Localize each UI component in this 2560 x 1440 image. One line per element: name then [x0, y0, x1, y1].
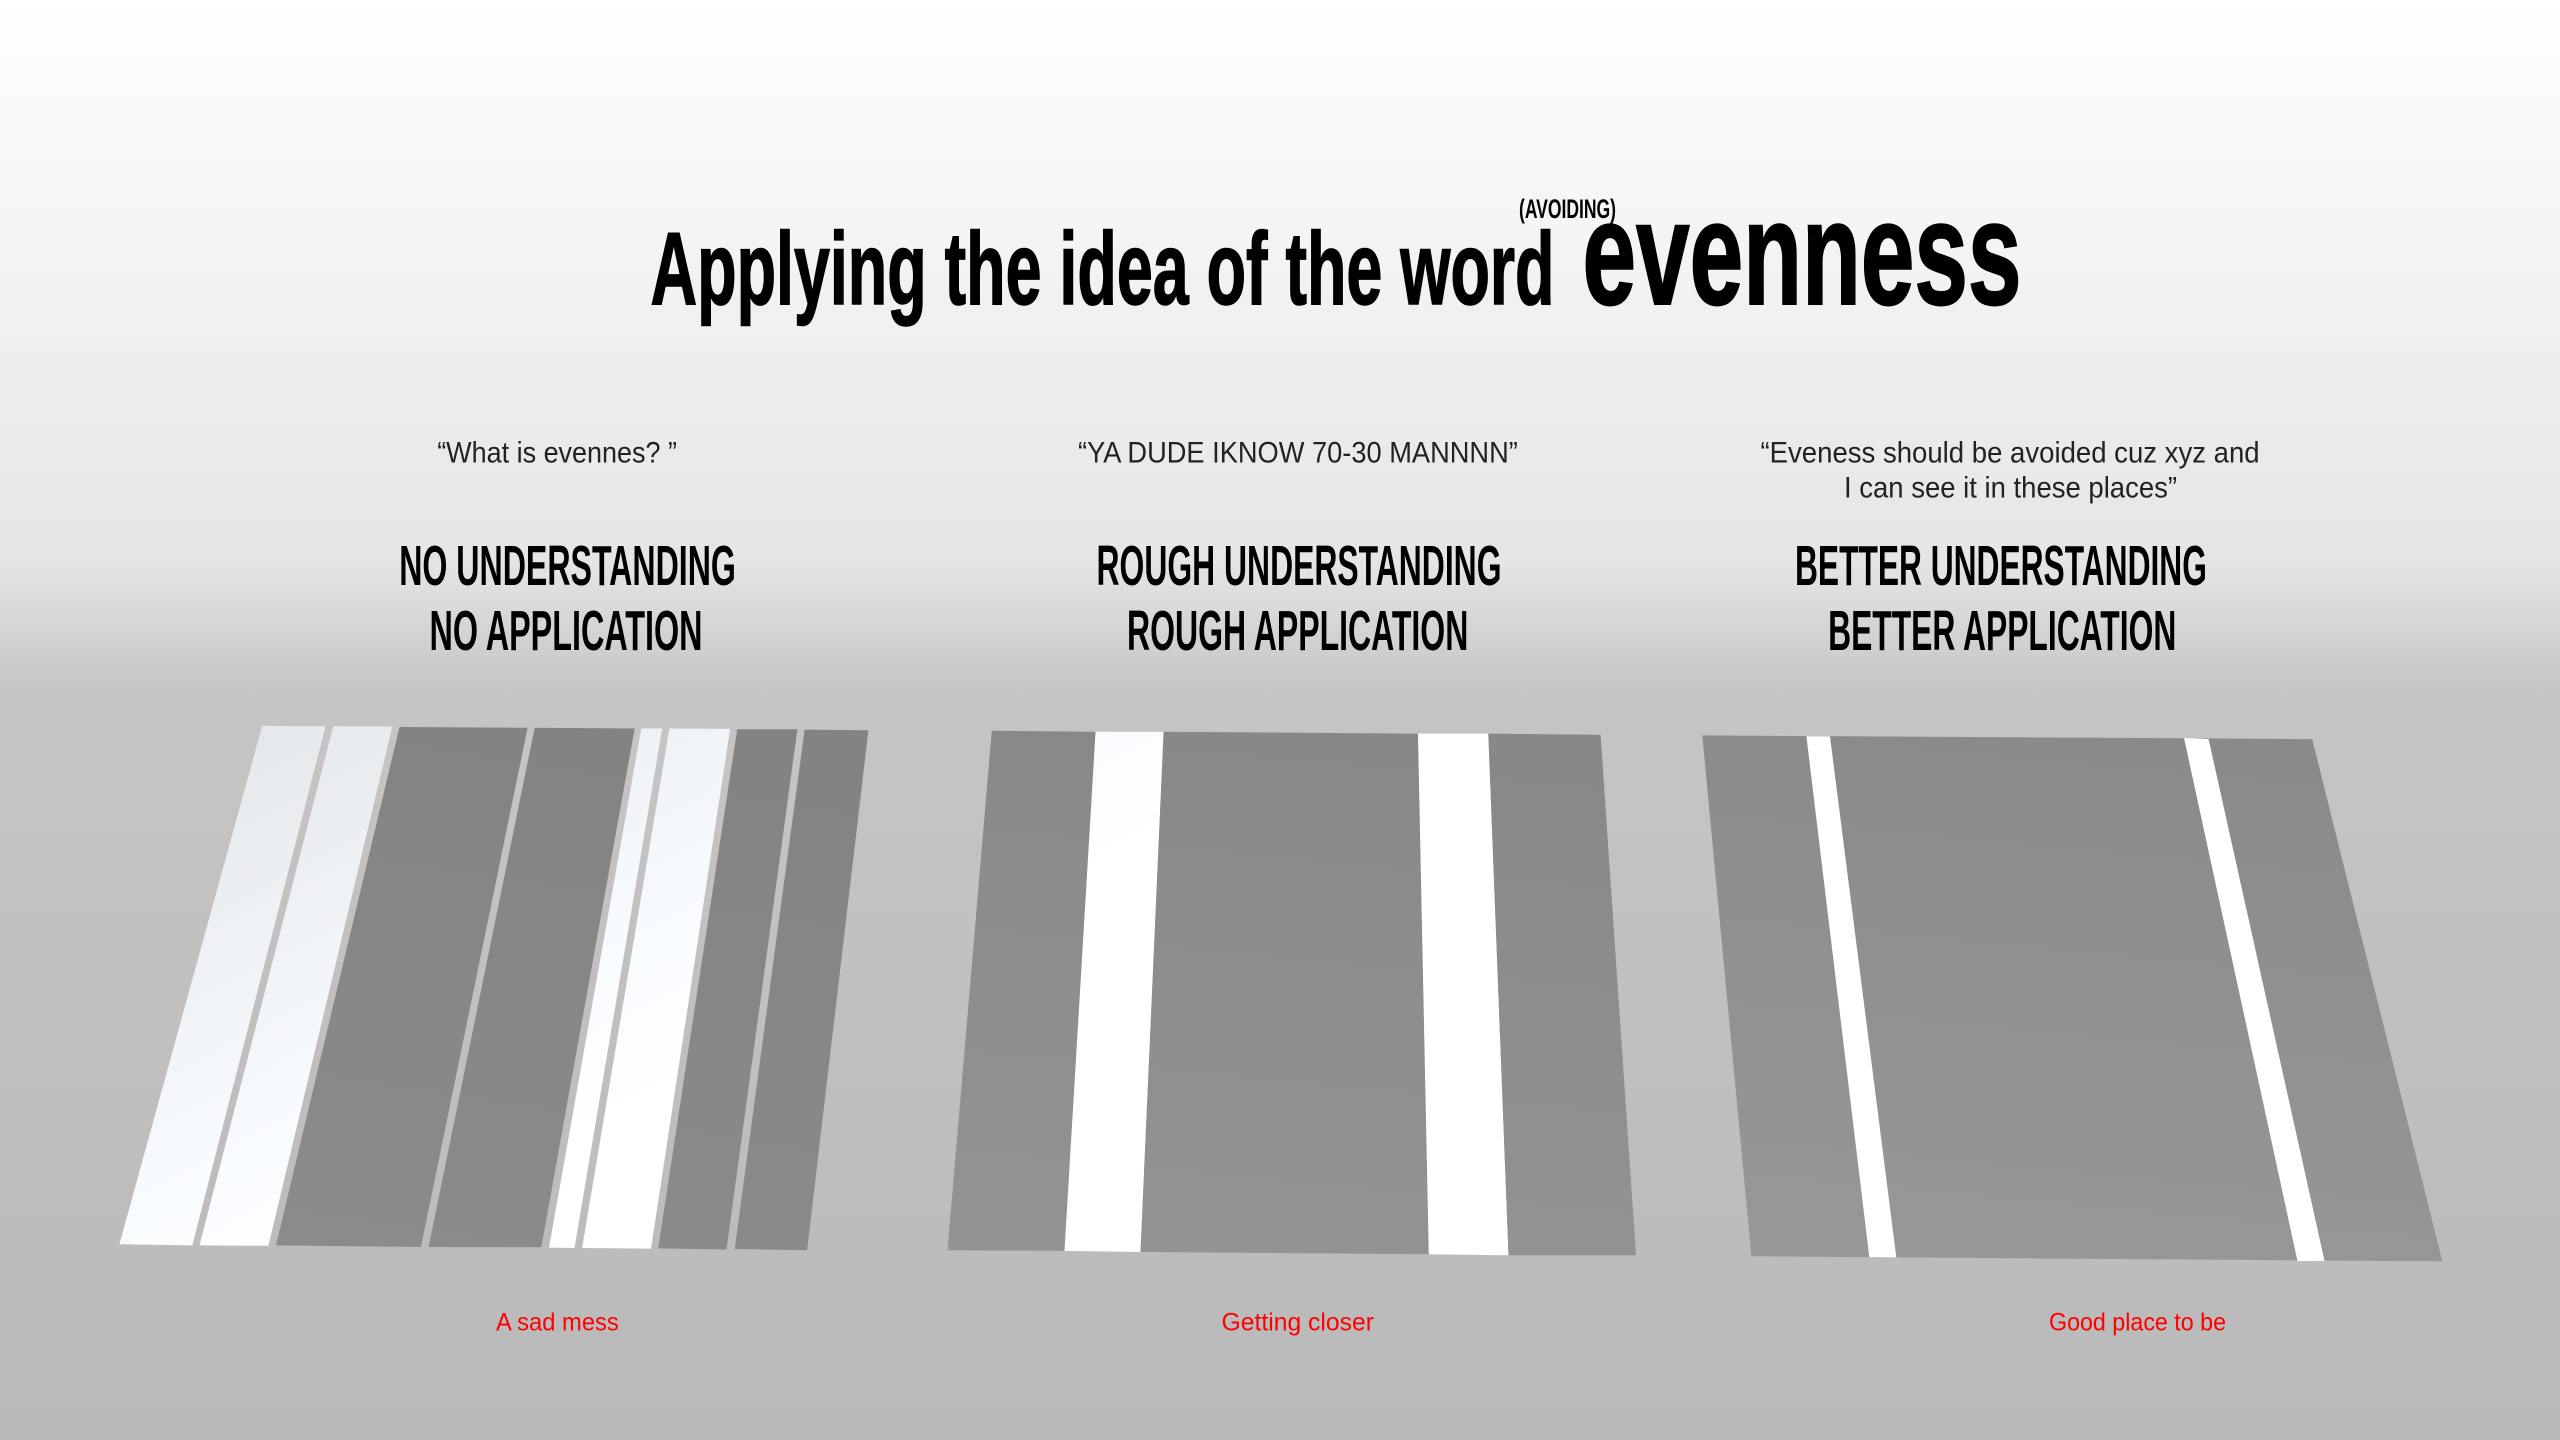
column 1 text	[399, 437, 736, 663]
title	[650, 171, 2022, 336]
column 2 text	[1078, 437, 1518, 663]
quote 3 line 2: I can see it in these places”	[1844, 472, 2177, 505]
column 3 text	[1760, 437, 2260, 663]
caption 2: Getting closer	[1222, 1309, 1374, 1337]
quote 2: “YA DUDE IKNOW 70-30 MANNNN”	[1078, 437, 1518, 470]
striped plane 1: sad mess	[119, 726, 868, 1250]
heading 2 line 2: ROUGH APPLICATION	[1127, 599, 1468, 663]
title: avoiding annotation: (AVOIDING)	[1519, 194, 1616, 224]
caption 3: Good place to be	[2049, 1309, 2226, 1337]
quote 1: “What is evennes? ”	[437, 437, 677, 470]
heading 2 line 1: ROUGH UNDERSTANDING	[1096, 534, 1502, 598]
title: main line: Applying the idea of the word	[650, 211, 1554, 326]
quote 3 line 1: “Eveness should be avoided cuz xyz and	[1760, 437, 2260, 470]
heading 1 line 1: NO UNDERSTANDING	[399, 534, 736, 598]
heading 3 line 2: BETTER APPLICATION	[1828, 599, 2176, 663]
heading 3 line 1: BETTER UNDERSTANDING	[1795, 534, 2207, 598]
heading 1 line 2: NO APPLICATION	[430, 599, 702, 663]
striped plane 3: good place to be	[1702, 735, 2442, 1261]
caption 1: A sad mess	[496, 1309, 619, 1337]
title: emphasised word: evenness	[1582, 171, 2022, 336]
striped plane 2: getting closer	[948, 731, 1636, 1255]
